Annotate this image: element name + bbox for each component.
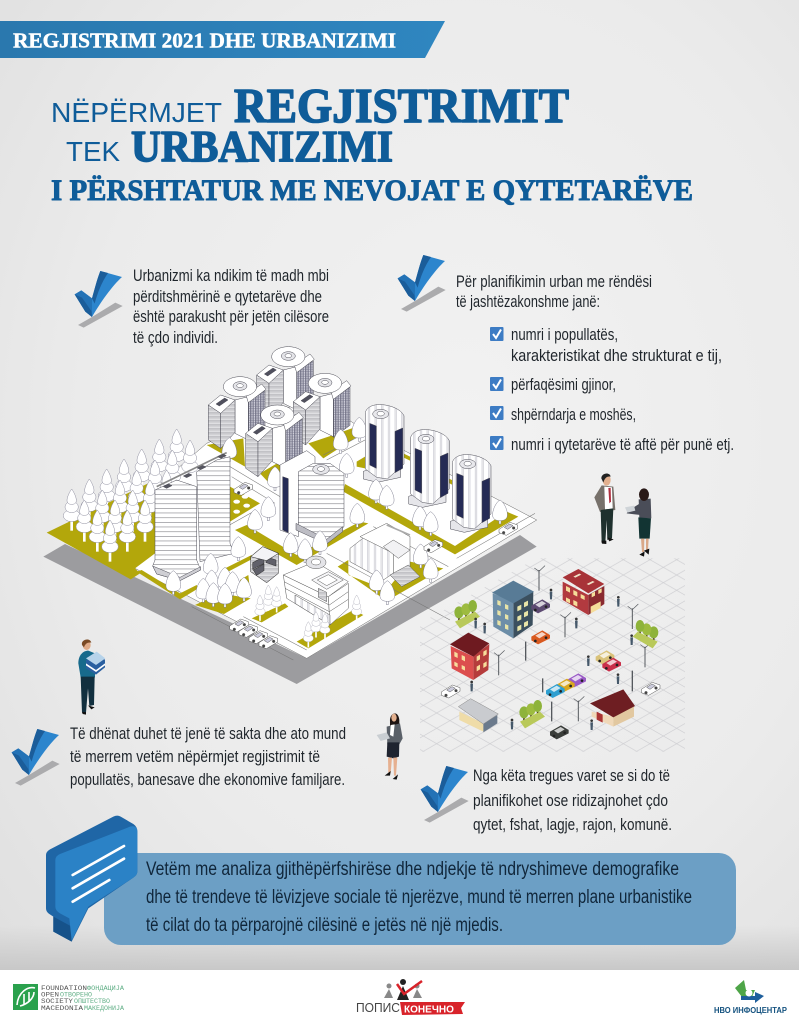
text block: urban planning importance list — [456, 272, 734, 454]
vehicles — [441, 599, 660, 739]
footer — [0, 970, 799, 1024]
blue apartment building — [492, 581, 534, 638]
text block: accurate data: Të dhënat duhet të jenë të sakta dhe ato mund — [70, 724, 346, 743]
road lines — [192, 433, 535, 660]
title: URBANIZIMI — [131, 122, 393, 171]
checkmark icon 2 — [398, 255, 446, 312]
title: TEK — [66, 136, 120, 167]
man in suit — [594, 473, 615, 544]
logo: Foundation Open Society Macedonia — [13, 984, 124, 1012]
text block: urban planning importance list: shpërndarja e moshës, — [511, 405, 636, 424]
white dots in garden — [233, 495, 250, 514]
small apartment block — [251, 547, 279, 583]
text block: urbanism intro: përditshmërinë e qytetarëve dhe — [133, 287, 322, 306]
checkmark icon 1 — [75, 271, 123, 328]
text block: accurate data: të merrem vetëm nëpërmjet regjistrimit të — [70, 747, 320, 766]
green trees — [454, 600, 658, 728]
text block: indicators: qytet, fshat, lagje, rajon, komunë. — [473, 815, 672, 834]
logo: NVO Infocentar — [714, 980, 788, 1015]
brown roof house — [590, 689, 635, 727]
trees near classical building — [369, 544, 438, 605]
logo: Foundation Open Society Macedonia: MACEDONIA — [41, 1005, 83, 1012]
title — [51, 78, 693, 207]
parked cars — [230, 482, 518, 649]
text block: indicators: Nga këta tregues varet se si do të — [473, 766, 670, 785]
title: NËPËRMJET — [51, 97, 222, 128]
header banner: REGJISTRIMI 2021 DHE URBANIZIMI — [13, 28, 396, 52]
text block: urbanism intro: është parakusht për jetën cilësore — [133, 307, 329, 326]
text block: accurate data — [70, 724, 346, 789]
residential tower cluster — [208, 347, 367, 491]
central tower — [280, 451, 344, 544]
white ground — [135, 397, 537, 658]
callout panel — [104, 853, 736, 945]
navy glass towers — [339, 405, 507, 536]
conifer forest — [63, 429, 198, 562]
logo: NVO Infocentar: НВО ИНФОЦЕНТАР — [714, 1006, 788, 1015]
title: REGJISTRIMIT — [234, 78, 569, 133]
street lamps — [494, 566, 651, 721]
logo: Popis Konechno: КОНЕЧНО — [404, 1004, 454, 1016]
woman with clipboard — [377, 713, 403, 780]
police station — [283, 556, 348, 625]
header banner — [0, 21, 445, 58]
logo: Foundation Open Society Macedonia: FOUNDATION — [41, 985, 87, 992]
checkmark icon 3 — [12, 729, 60, 786]
text block: indicators: planifikohet ose ridizajnohet çdo — [473, 791, 668, 810]
text block: urbanism intro — [133, 266, 329, 347]
red gabled building — [450, 633, 489, 680]
platform shadow — [43, 535, 537, 684]
text block: accurate data: popullatës, banesave dhe ekonomive familjare. — [70, 770, 345, 789]
pedestrians — [470, 589, 633, 730]
text block: urban planning importance list: numri i qytetarëve të aftë për punë etj. — [511, 435, 734, 454]
text block: urbanism intro: të çdo individi. — [133, 328, 218, 347]
callout panel: Vetëm me analiza gjithëpërfshirëse dhe ndjekje të ndryshimeve demografike — [146, 859, 679, 880]
text block: urban planning importance list: numri i popullatës, — [511, 325, 618, 344]
logo: Foundation Open Society Macedonia: ОТВОРЕНО — [60, 992, 92, 998]
red office building — [563, 569, 604, 615]
round trees mid — [166, 497, 365, 595]
woman with tablet — [625, 488, 651, 557]
small tree block — [196, 567, 251, 607]
man carrying boxes — [78, 640, 105, 715]
trees by police station — [255, 585, 362, 647]
text block: urban planning importance list: karakteristikat dhe strukturat e tij, — [511, 346, 722, 365]
text block: urban planning importance list: përfaqësimi gjinor, — [511, 375, 616, 394]
text block: urban planning importance list: Për planifikimin urban me rëndësi — [456, 272, 652, 291]
logo: Foundation Open Society Macedonia: SOCIETY — [41, 998, 73, 1005]
street-level city scene — [420, 473, 685, 752]
logo: Foundation Open Society Macedonia: ОПШТЕСТВО — [74, 998, 110, 1005]
isometric city illustration — [43, 347, 537, 684]
text block: urbanism intro: Urbanizmi ka ndikim të madh mbi — [133, 266, 329, 285]
logo: Foundation Open Society Macedonia: ФОНДАЦИЈА — [87, 985, 124, 992]
text block: indicators — [473, 766, 672, 834]
logo: Popis Konechno — [356, 979, 465, 1016]
callout panel: të cilat do ta përparojnë cilësinë e jetës në një mjedis. — [146, 915, 503, 936]
olive park and green strips — [47, 427, 518, 648]
checkmark icon 4 — [421, 766, 469, 823]
text block: urban planning importance list: të jashtëzakonshme janë: — [456, 292, 600, 311]
isometric street grid — [420, 558, 685, 752]
title: I PËRSHTATUR ME NEVOJAT E QYTETARËVE — [51, 174, 693, 207]
logo: Popis Konechno: ПОПИС — [356, 1000, 400, 1015]
classical building — [350, 523, 420, 587]
twin tower — [153, 453, 234, 581]
icon: speech bubble — [46, 816, 137, 942]
logo: Foundation Open Society Macedonia: OPEN — [41, 992, 59, 998]
flat-roof shop — [458, 699, 498, 732]
logo: Foundation Open Society Macedonia: МАКЕДОНИЈА — [84, 1005, 124, 1012]
